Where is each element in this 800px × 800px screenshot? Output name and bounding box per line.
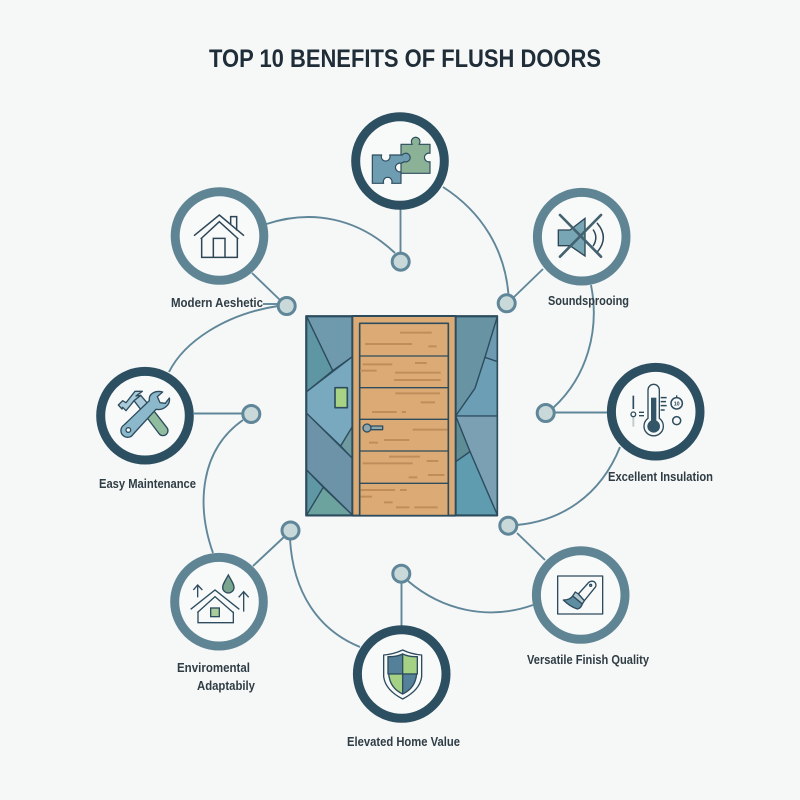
icon: hammer and wrench [118, 391, 169, 437]
label: Versatile Finish Quality: Versatile Finish Quality [527, 653, 649, 667]
icon circle: insulation [611, 367, 700, 456]
icon circle: versatile finish [536, 551, 625, 639]
icon: paint brush in frame [558, 576, 603, 614]
icon circle: puzzle [356, 117, 444, 205]
label: Modern Aesthetic: Modern Aeshetic [171, 296, 263, 310]
label: Environmental Adaptability: Adaptabily [197, 679, 255, 693]
icon circle: modern aesthetic [175, 192, 264, 280]
icon: shield [384, 650, 422, 699]
label: Environmental Adaptability: Enviromental [177, 661, 250, 675]
label: Elevated Home Value: Elevated Home Value [347, 735, 460, 749]
icon: house with drop and arrows [191, 575, 249, 623]
title: TOP 10 BENEFITS OF FLUSH DOORS [209, 45, 601, 73]
central door panel [306, 316, 497, 516]
icon: thermometer: 10 [674, 401, 680, 407]
label: Environmental Adaptability [177, 661, 255, 693]
label: Easy Maintenance: Easy Maintenance [99, 477, 196, 491]
icon circle: home value [357, 630, 446, 718]
icon: puzzle pieces [372, 137, 430, 183]
label: Excellent Insulation: Excellent Insulation [608, 470, 713, 484]
node dots [243, 253, 554, 582]
connector lines [169, 187, 620, 647]
icon: muted speaker [558, 215, 603, 257]
label: Soundproofing: Soundsprooing [548, 294, 629, 308]
icon circle: easy maintenance [101, 371, 189, 460]
icon: house [194, 215, 244, 257]
icon circle: soundproofing [537, 192, 626, 281]
icon circle: environmental adaptability [175, 557, 263, 646]
